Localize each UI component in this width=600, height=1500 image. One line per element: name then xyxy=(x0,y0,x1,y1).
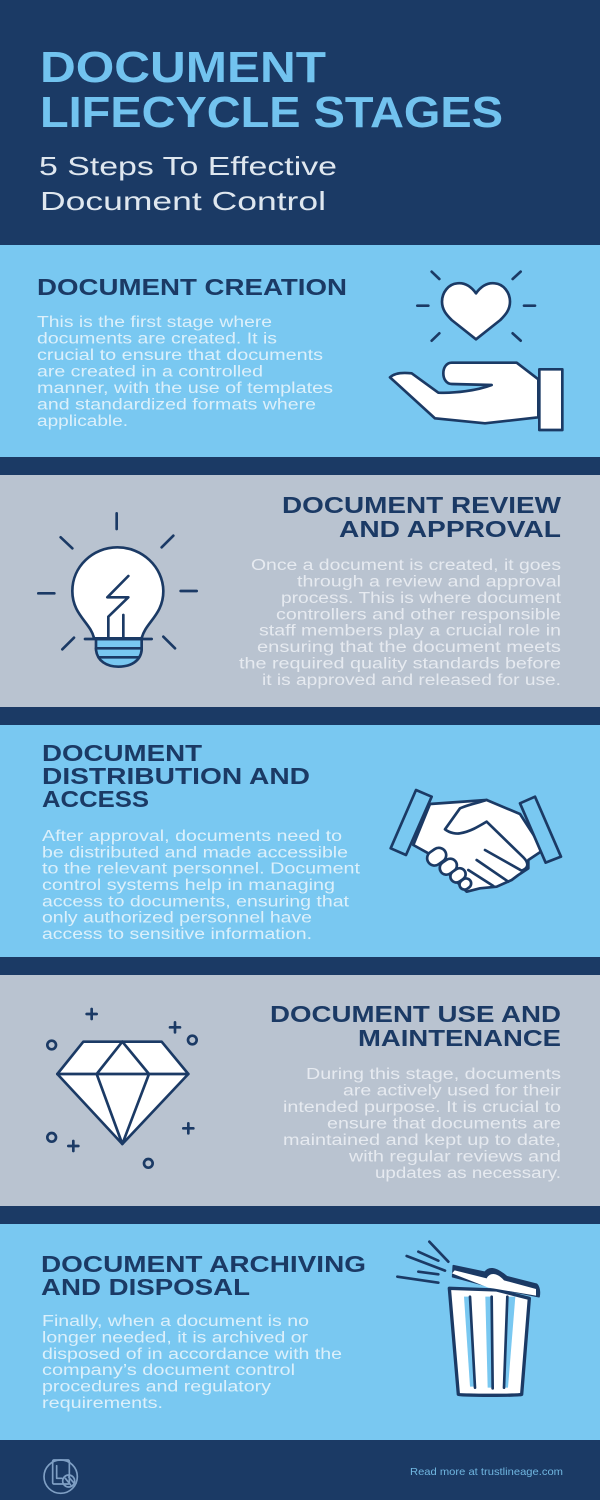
text: document archiving and disposal: procedures and regulatory xyxy=(42,1379,271,1396)
text: document review and approval: ensuring that the document meets xyxy=(257,639,561,656)
title xyxy=(40,44,503,137)
divider band xyxy=(0,457,600,475)
text: document distribution and access: access to sensitive information. xyxy=(42,926,312,943)
text: document distribution and access: be distributed and made accessible xyxy=(42,844,348,861)
icon: trash can xyxy=(397,1242,539,1395)
heading: document use and maintenance: MAINTENANCE xyxy=(358,1025,561,1051)
icon: light bulb xyxy=(38,513,197,667)
logo xyxy=(44,1460,77,1493)
text: document archiving and disposal: Finally, when a document is no xyxy=(42,1313,309,1330)
text: document use and maintenance xyxy=(283,1066,561,1182)
heading: document archiving and disposal xyxy=(41,1251,366,1300)
heading: document review and approval: DOCUMENT REVIEW xyxy=(282,492,562,518)
text: document archiving and disposal: disposed of in accordance with the xyxy=(42,1346,342,1363)
divider band xyxy=(0,957,600,975)
text: document distribution and access: control systems help in managing xyxy=(42,877,335,894)
icon: hand holding heart xyxy=(390,272,562,430)
title: LIFECYCLE STAGES xyxy=(40,89,503,137)
heading: document archiving and disposal: DOCUMENT ARCHIVING xyxy=(41,1251,366,1277)
text: document distribution and access: After approval, documents need to xyxy=(42,828,342,845)
text: document review and approval: staff members play a crucial role in xyxy=(259,623,561,640)
heading: document archiving and disposal: AND DISPOSAL xyxy=(41,1274,250,1300)
text: document review and approval: Once a document is created, it goes xyxy=(251,557,561,574)
text: document distribution and access: access to documents, ensuring that xyxy=(42,893,350,910)
text: document distribution and access xyxy=(42,828,361,943)
text: document archiving and disposal: company’s document control xyxy=(42,1362,295,1379)
divider band xyxy=(0,707,600,725)
text: document archiving and disposal: requirements. xyxy=(42,1395,163,1412)
heading: document review and approval xyxy=(282,492,562,542)
divider band xyxy=(0,1206,600,1224)
icon: handshake xyxy=(391,790,561,892)
panel: header xyxy=(0,0,600,245)
text: document creation: crucial to ensure that documents xyxy=(37,347,323,364)
text: document creation: documents are created. It is xyxy=(37,330,277,348)
subtitle: 5 Steps To Effective xyxy=(39,151,337,181)
text: document use and maintenance: with regular reviews and xyxy=(348,1148,561,1166)
panel: document review and approval xyxy=(0,475,600,707)
text: document use and maintenance: maintained and kept up to date, xyxy=(283,1132,561,1149)
subtitle xyxy=(39,151,337,216)
text: document review and approval: it is approved and released for use. xyxy=(262,672,561,689)
heading: document review and approval: AND APPROVAL xyxy=(339,516,561,542)
text: document archiving and disposal: longer needed, it is archived or xyxy=(42,1329,308,1346)
heading: document distribution and access xyxy=(42,740,310,812)
panel: footer xyxy=(0,1440,600,1500)
heading: document use and maintenance: DOCUMENT USE AND xyxy=(270,1001,561,1027)
text: document use and maintenance: ensure that documents are xyxy=(327,1116,561,1132)
text: document distribution and access: to the relevant personnel. Document xyxy=(42,861,361,878)
heading: document use and maintenance xyxy=(270,1001,561,1051)
text: document creation: applicable. xyxy=(37,413,128,430)
text: document use and maintenance: intended purpose. It is crucial to xyxy=(283,1099,561,1116)
text: document review and approval: controllers and other responsible xyxy=(276,606,561,623)
text: document creation: manner, with the use of templates xyxy=(37,380,333,397)
panel: document distribution and access xyxy=(0,725,600,957)
text: document review and approval: the required quality standards before xyxy=(239,656,561,673)
heading: document distribution and access: ACCESS xyxy=(42,786,149,812)
text: document review and approval xyxy=(239,557,562,689)
text: document creation: are created in a controlled xyxy=(37,364,263,380)
heading: document distribution and access: DISTRIBUTION AND xyxy=(42,763,310,789)
link text: Read more at trustlineage.com xyxy=(410,1466,563,1478)
text: document distribution and access: only authorized personnel have xyxy=(42,910,312,927)
text: document review and approval: process. This is where document xyxy=(281,590,562,607)
text: document creation xyxy=(37,314,333,430)
panel: document creation xyxy=(0,245,600,457)
text: document use and maintenance: are actively used for their xyxy=(343,1082,561,1100)
title: DOCUMENT xyxy=(40,44,326,92)
text: document use and maintenance: updates as necessary. xyxy=(375,1165,561,1182)
text: document archiving and disposal xyxy=(42,1313,342,1412)
text: document use and maintenance: During this stage, documents xyxy=(306,1066,561,1083)
text: document creation: This is the first stage where xyxy=(37,314,272,331)
icon: diamond xyxy=(47,1009,197,1168)
panel: document use and maintenance xyxy=(0,975,600,1206)
text: document creation: and standardized formats where xyxy=(37,396,316,414)
text: document review and approval: through a review and approval xyxy=(297,573,561,590)
heading: document distribution and access: DOCUMENT xyxy=(42,740,203,766)
heading: document creation: DOCUMENT CREATION xyxy=(37,274,347,300)
subtitle: Document Control xyxy=(40,186,326,216)
panel: document archiving and disposal xyxy=(0,1224,600,1440)
